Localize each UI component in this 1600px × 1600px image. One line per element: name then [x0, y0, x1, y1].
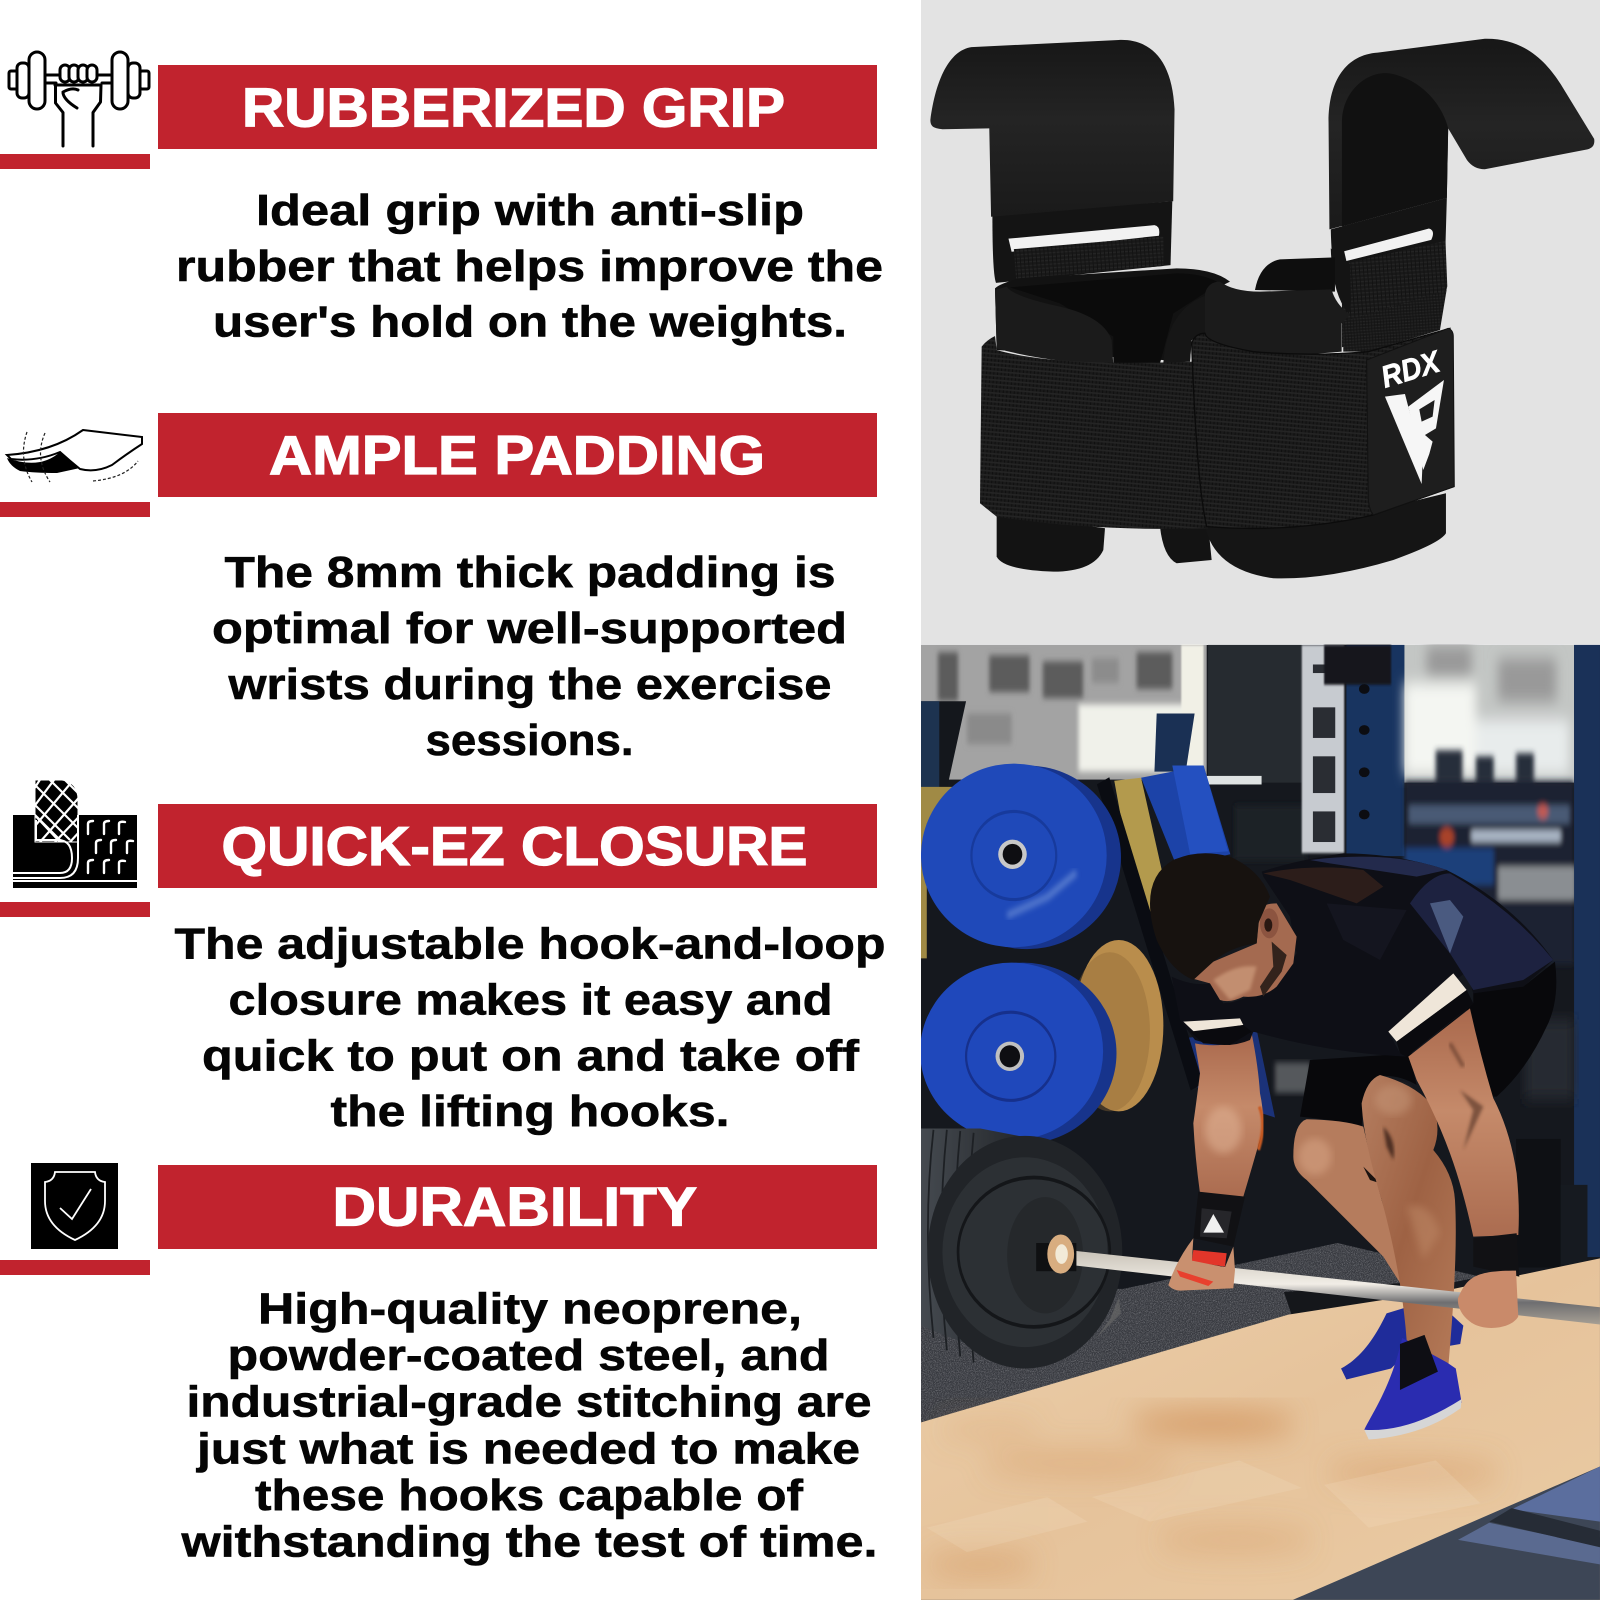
athlete: back shoe	[1341, 1307, 1463, 1380]
athlete: front shoe, barbell and collar	[1036, 1234, 1600, 1440]
front shoe	[1364, 1338, 1462, 1439]
icon: padded sheet	[7, 430, 142, 482]
body text: quick-ez closure: closure makes it easy and	[228, 976, 832, 1024]
heading banner: ample padding	[158, 413, 877, 497]
bottom padding	[997, 493, 1446, 578]
right wrist strap	[1192, 328, 1453, 528]
dark carpet	[921, 1243, 1480, 1422]
heading: rubberized grip: RUBBERIZED GRIP	[242, 76, 785, 138]
far leg	[1293, 1119, 1407, 1293]
athlete: body	[1150, 853, 1556, 1370]
accent bar	[0, 154, 150, 169]
body text: ample padding: The 8mm thick padding is	[224, 548, 836, 597]
wooden floor	[921, 1258, 1600, 1600]
body text: quick-ez closure	[174, 920, 886, 1136]
body text: durability: High-quality neoprene,	[258, 1284, 802, 1334]
heading: ample padding: AMPLE PADDING	[269, 424, 765, 486]
accent bar	[0, 502, 150, 517]
panel: rubberized grip	[0, 52, 883, 346]
body text: quick-ez closure: The adjustable hook-and-loop	[174, 920, 886, 968]
right neoprene pad	[1205, 282, 1350, 354]
left wrist strap	[980, 336, 1208, 529]
body text: durability: withstanding the test of time.	[180, 1518, 878, 1566]
body text: durability: powder-coated steel, and	[228, 1331, 830, 1380]
barbell	[1076, 1251, 1600, 1324]
body text: ample padding: optimal for well-supported	[212, 604, 847, 653]
body text: rubberized grip: rubber that helps improve the	[176, 242, 883, 291]
brand label: RDX	[1377, 344, 1445, 395]
heading banner: quick-ez closure	[158, 804, 877, 888]
right lower strap fold	[1343, 290, 1447, 352]
body text: quick-ez closure: quick to put on and take off	[202, 1032, 859, 1080]
panel: ample padding	[0, 413, 877, 765]
panel: quick-ez closure	[0, 770, 886, 1136]
body text: durability: just what is needed to make	[196, 1424, 860, 1474]
product: pair of wrist hooks, upper parts	[930, 39, 1594, 347]
body text: durability: these hooks capable of	[255, 1471, 803, 1520]
near leg	[1362, 1075, 1456, 1370]
accent bar	[0, 1260, 150, 1275]
body text: rubberized grip	[176, 186, 883, 346]
icon: shield with check mark	[31, 1163, 118, 1249]
far arm	[1408, 1008, 1519, 1237]
weight plates on rack	[920, 764, 1275, 1144]
heading: quick-ez closure: QUICK-EZ CLOSURE	[222, 815, 808, 877]
heading: durability: DURABILITY	[332, 1176, 697, 1238]
shorts	[1300, 962, 1556, 1127]
body text: rubberized grip: Ideal grip with anti-slip	[256, 186, 804, 235]
body text: durability	[180, 1284, 878, 1566]
near arm	[1193, 1033, 1263, 1197]
brand label	[1367, 328, 1454, 515]
icon: hook and loop closure	[13, 770, 137, 888]
athlete: near wrist hook and hand	[1168, 1192, 1519, 1291]
sleeve stripes	[1183, 973, 1473, 1057]
heading banner: rubberized grip	[158, 65, 877, 149]
panel: durability	[0, 1163, 878, 1566]
gym background	[921, 645, 1600, 1600]
body text: ample padding	[212, 548, 847, 765]
body text: rubberized grip: user's hold on the weights.	[213, 298, 847, 346]
panel: photo of athlete deadlifting with hooks	[920, 645, 1600, 1600]
panel: product image of lifting hooks	[921, 0, 1600, 644]
athlete: far hand	[1458, 1271, 1518, 1328]
icon: fist gripping dumbbell	[9, 52, 149, 146]
shirt	[1172, 853, 1553, 1057]
photo scene background	[920, 645, 1600, 1600]
product: wrist section, padding and straps	[980, 257, 1454, 578]
loaded barbell plate	[921, 1129, 1122, 1369]
far wrist strap	[1473, 1233, 1519, 1277]
body text: ample padding: wrists during the exercise	[227, 660, 831, 709]
left neoprene pad	[995, 268, 1230, 365]
body text: durability: industrial-grade stitching are	[186, 1378, 872, 1426]
accent bar	[0, 902, 150, 917]
body text: ample padding: sessions.	[426, 716, 634, 765]
heading banner: durability	[158, 1165, 877, 1249]
right rear pad	[1255, 257, 1335, 292]
head	[1150, 853, 1297, 1001]
body text: quick-ez closure: the lifting hooks.	[330, 1087, 730, 1136]
right hook	[1329, 39, 1594, 347]
left hook	[930, 40, 1175, 283]
